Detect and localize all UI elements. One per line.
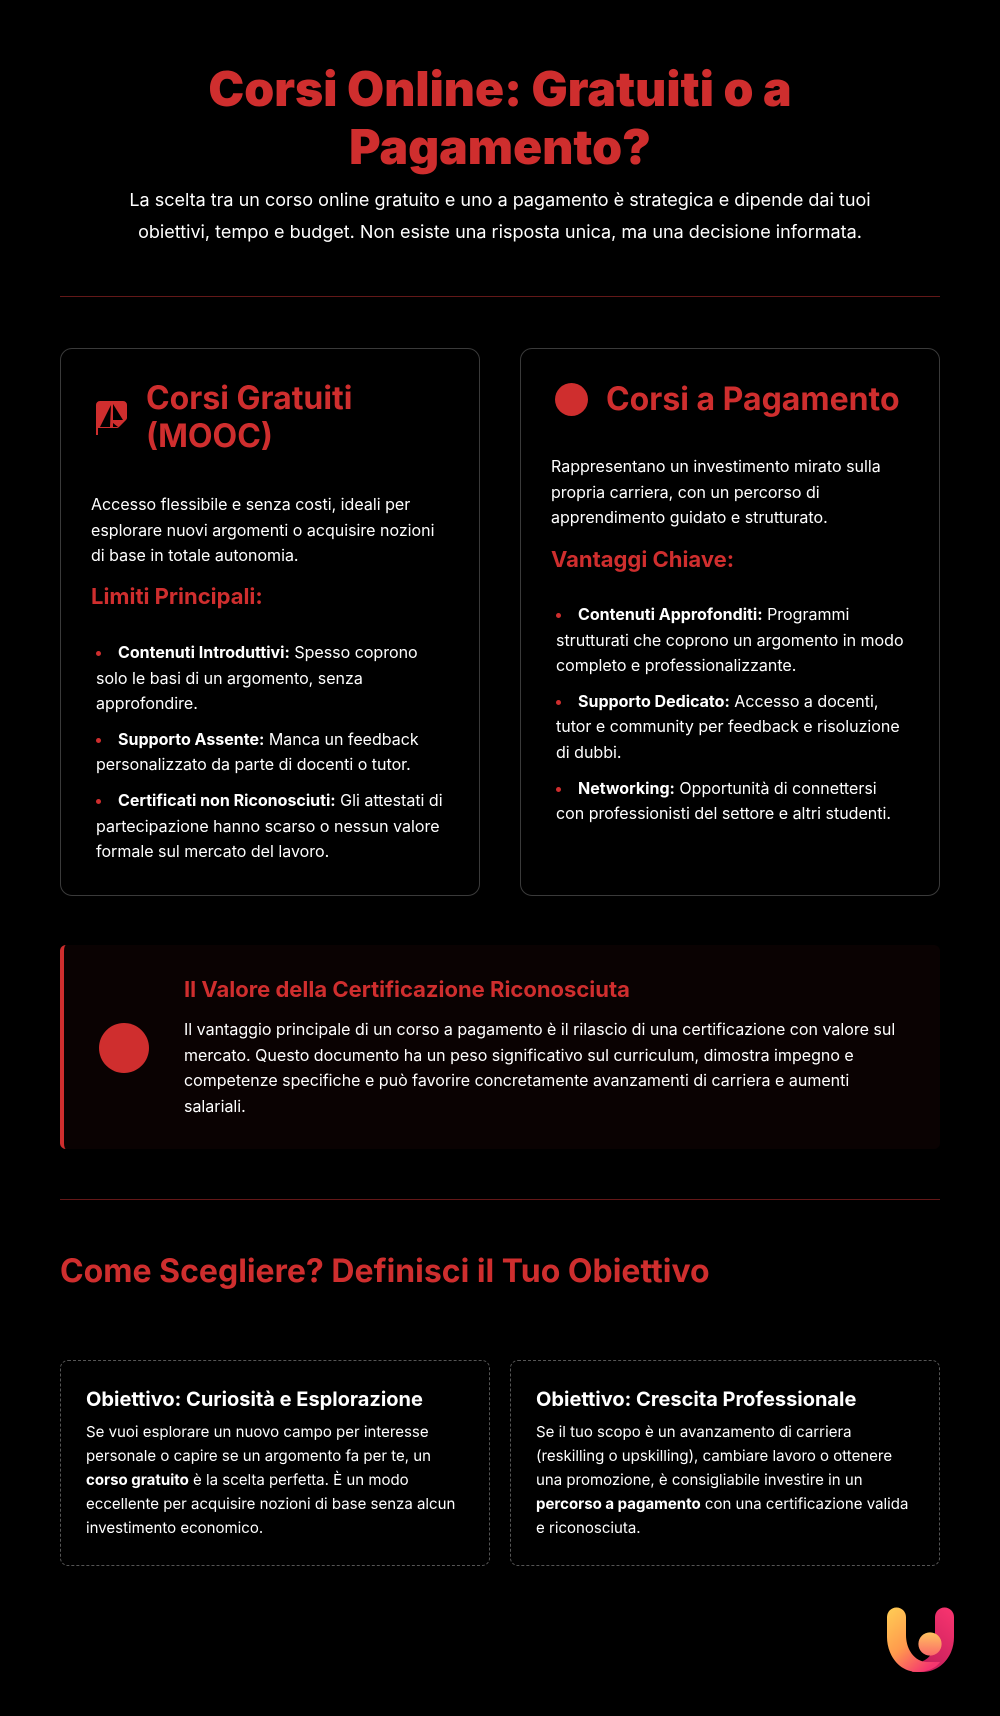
goal text [86, 1422, 455, 1537]
icon: circle [99, 1023, 149, 1073]
item: contenuti approfonditi [556, 604, 904, 675]
item: supporto dedicato: di dubbi. [556, 742, 622, 762]
subtitle [129, 190, 871, 243]
text: intro: di base in totale autonomia. [91, 545, 299, 565]
heading: corsi gratuiti: (MOOC) [146, 416, 273, 455]
goal text: una promozione, è consigliabile investire in un [536, 1470, 863, 1489]
subtitle: obiettivi, tempo e budget. Non esiste una risposta unica, ma una decisione informata. [138, 222, 862, 243]
callout text: mercato. Questo documento ha un peso significativo sul curriculum, dimostra impegno e [184, 1045, 854, 1065]
text: intro: esplorare nuovi argomenti o acquisire nozioni [91, 520, 434, 540]
text: intro: propria carriera, con un percorso di [551, 482, 820, 502]
goal text [536, 1422, 908, 1537]
subtitle: La scelta tra un corso online gratuito e uno a pagamento è strategica e dipende dai tuoi [129, 190, 871, 211]
item: networking: Networking: Opportunità di connettersi [578, 778, 877, 798]
goal text: personale o capire se un argomento fa per te, un [86, 1446, 431, 1465]
text: intro: Accesso flessibile e senza costi, ideali per [91, 494, 410, 514]
item: supporto assente: Supporto Assente: Manca un feedback [118, 729, 419, 749]
goal text: Se il tuo scopo è un avanzamento di carriera [536, 1422, 852, 1441]
item: contenuti approfonditi: strutturati che coprono un argomento in modo [556, 630, 904, 650]
item: supporto dedicato [556, 691, 900, 762]
item: networking [556, 778, 891, 823]
item: supporto dedicato: Supporto Dedicato: Accesso a docenti, [578, 691, 878, 711]
list: vantaggi [556, 604, 904, 823]
goal text: corso gratuito è la scelta perfetta. È un modo [86, 1470, 409, 1489]
item: networking: con professionisti del settore e altri studenti. [556, 803, 891, 823]
title [208, 59, 792, 176]
text: intro: apprendimento guidato e strutturato. [551, 507, 828, 527]
goal text: Se vuoi esplorare un nuovo campo per interesse [86, 1422, 429, 1441]
item: supporto dedicato: tutor e community per feedback e risoluzione [556, 716, 900, 736]
panel: obiettivo curiosità [60, 1360, 490, 1566]
goal heading: Obiettivo: Curiosità e Esplorazione [86, 1387, 423, 1411]
heading: corsi gratuiti [146, 378, 352, 455]
callout: valore della certificazione [60, 945, 940, 1149]
text: intro: Rappresentano un investimento mirato sulla [551, 456, 881, 476]
panel: obiettivo crescita [510, 1360, 940, 1566]
goal heading: Obiettivo: Crescita Professionale [536, 1387, 856, 1411]
list: limiti [96, 642, 443, 861]
callout text: Il vantaggio principale di un corso a pagamento è il rilascio di una certificazione con valore sul [184, 1019, 895, 1039]
item: supporto assente [96, 729, 419, 774]
text: intro [551, 456, 881, 527]
icon: logo [887, 1608, 954, 1672]
callout text [184, 1019, 895, 1116]
goal text: (reskilling o upskilling), cambiare lavoro o ottenere [536, 1446, 892, 1465]
heading: vantaggi chiave: Vantaggi Chiave: [551, 547, 734, 573]
item: contenuti introduttivi: solo le basi di un argomento, senza [96, 668, 363, 688]
callout text: salariali. [184, 1096, 246, 1116]
icon: circle [554, 382, 588, 416]
item: certificati non riconosciuti: Certificati non Riconosciuti: Gli attestati di [118, 790, 443, 810]
title: Corsi Online: Gratuiti o a [208, 59, 792, 118]
item: certificati non riconosciuti: formale sul mercato del lavoro. [96, 841, 329, 861]
section heading: come scegliere: Come Scegliere? Definisci il Tuo Obiettivo [60, 1251, 710, 1290]
panel: corsi gratuiti [60, 348, 480, 896]
heading: corsi a pagamento: Corsi a Pagamento [606, 379, 900, 418]
callout text: competenze specifiche e può favorire concretamente avanzamenti di carriera e aumenti [184, 1070, 849, 1090]
title: Pagamento? [349, 117, 651, 176]
callout heading: Il Valore della Certificazione Riconosciuta [184, 977, 630, 1003]
goal text: eccellente per acquisire nozioni di base senza alcun [86, 1494, 455, 1513]
icon: sailboat document [96, 401, 127, 435]
item: contenuti introduttivi: approfondire. [96, 693, 198, 713]
heading: corsi gratuiti: Corsi Gratuiti [146, 378, 352, 417]
item: contenuti approfonditi: Contenuti Approfonditi: Programmi [578, 604, 849, 624]
item: contenuti introduttivi [96, 642, 418, 713]
item: supporto assente: personalizzato da parte di docenti o tutor. [96, 754, 411, 774]
item: contenuti approfonditi: completo e professionalizzante. [556, 655, 796, 675]
text: intro [91, 494, 434, 565]
item: certificati non riconosciuti [96, 790, 443, 861]
heading: limiti principali: Limiti Principali: [91, 584, 263, 610]
goal text: percorso a pagamento con una certificazione valida [536, 1494, 908, 1513]
goal text: e riconosciuta. [536, 1518, 641, 1537]
item: contenuti introduttivi: Contenuti Introduttivi: Spesso coprono [118, 642, 418, 662]
goal text: investimento economico. [86, 1518, 263, 1537]
panel: corsi a pagamento [520, 348, 940, 896]
item: certificati non riconosciuti: partecipazione hanno scarso o nessun valore [96, 816, 440, 836]
